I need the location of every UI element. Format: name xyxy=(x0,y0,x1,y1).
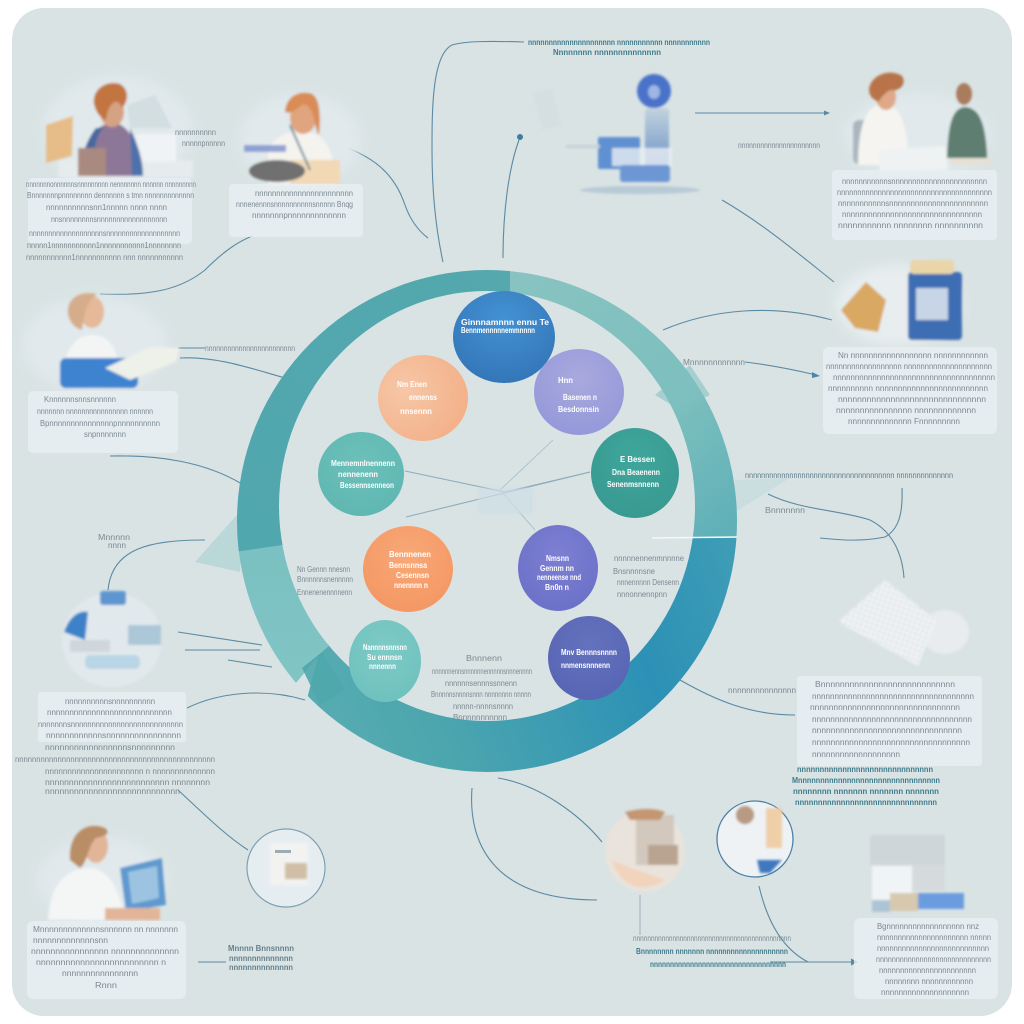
small label: below wide label: Bnnnnnnn xyxy=(765,505,805,515)
text panel: left lab: nnnnnnnnnnnnsnnnnnnnnnnnnnnnn xyxy=(46,730,181,740)
text panel: right lower: nnnnnnnnnnnnnnnnnnnnnnnnnnnnnnnnnnnn xyxy=(812,691,974,701)
text panel: right upper xyxy=(823,347,997,434)
text panel: top right: nnnnnnnnnnnsnnnnnnnnnnnnnnnnnnnnnnn xyxy=(838,198,988,208)
circle: lilac node: Basenen n xyxy=(563,393,597,402)
circle: blue node xyxy=(453,291,555,383)
text panel: bottom left: Mnnnnnnnnnnnnnsnnnnnn nn nnnnnnn xyxy=(33,924,178,934)
text panel: telephone: nnnenennnsnnnnnnnnnnsnnnnn Bnqg xyxy=(236,199,353,209)
title label: top: Nnnnnnnn nnnnnnnnnnnnnn xyxy=(553,47,661,57)
inner caption: bottom center: nnnnnnennsnnnnnnennnnnsnnnennnn xyxy=(432,666,532,676)
text panel: bottom left: nnnnnnnnnnnnnnnnnnnnnnnnn n xyxy=(36,957,166,967)
text panel: right upper: nnnnnnnnnnnnnn Fnnnnnnnnn xyxy=(848,416,960,426)
text panel: left lab xyxy=(15,692,215,796)
text panel: bottom right: nnnnnnnnnnnnnnnnnnnnnnn xyxy=(879,965,976,975)
small label: top left: nnnnnpnnnnn xyxy=(182,138,225,148)
circle: green node: E Bessen xyxy=(620,455,655,464)
text panel: person three: snpnnnnnnn xyxy=(84,429,126,439)
circle: orange node: nnennnn n xyxy=(394,581,428,590)
text panel: left lab: nnnnnnnnnnnnnnnnnnnnnnnnnn nnnnnnnn xyxy=(45,777,210,787)
illustration: circular lab photo xyxy=(62,591,162,687)
circle: peach node: ennenss xyxy=(409,393,437,402)
text panel: bottom right: Bgnnnnnnnnnnnnnnnnnn nnz xyxy=(877,921,979,931)
center network lines xyxy=(405,440,590,530)
circle: light teal node xyxy=(349,620,421,702)
inner caption: right of indigo node: nnnnnennenmnnnne xyxy=(614,553,684,563)
text panel: left lab: nnnnnnnnnnnnnnnnnnnnnn n nnnnnnnnnnnnnn xyxy=(45,766,215,776)
circle: orange node xyxy=(363,526,453,612)
illustration: round photo peach xyxy=(605,809,685,892)
circle: indigo node xyxy=(518,525,598,611)
text panel: top left: nnnnn1nnnnnnnnnnn1nnnnnnnnnnn1nnnnnnnn xyxy=(27,240,181,250)
text panel: left lab: nnnnnnnsnnnnnnnnnnnnnnnnnnnnnnnnnnn xyxy=(38,719,183,729)
text panel: top right xyxy=(832,170,997,240)
inner caption: bottom center xyxy=(431,653,532,722)
circle: light teal node: Su ennnsn xyxy=(367,653,402,662)
circle: navy node: Mnv Bennnsnnnn xyxy=(561,648,617,657)
inner caption: left of orange node: Bnnnnnnsnennnnn xyxy=(297,574,353,584)
teal caption: bottom center: Bnnnnnnnn nnnnnnn nnnnnnnnnnnnnnnnnnnn xyxy=(636,946,788,956)
teal caption: right lower: nnnnnnnnnnnnnnnnnnnnnnnnnnnnnnn xyxy=(795,797,937,807)
inner caption: bottom center: nnnnnnsennnssnnenn xyxy=(445,678,517,688)
text panel: top left: nnsnnnnnnnnsnnnnnnnnnnnnnnnnnn xyxy=(51,214,167,224)
text panel: right lower: nnnnnnnnnnnnnnnnnnnnnnnnnnnnnnnnnnn xyxy=(812,714,972,724)
circle: light teal node: nnnennn xyxy=(369,662,396,671)
illustration: person on telephone xyxy=(240,93,360,186)
small label: bottom left xyxy=(228,943,294,972)
text panel: bottom right: nnnnnnnnnnnnnnnnnnnnnnnnnnnnn xyxy=(876,954,991,964)
small label: device: nnnnnnnnnnnnnnnnnnnnnn xyxy=(738,140,820,150)
inner caption: bottom center: Bnnnnnnnnnnn xyxy=(453,712,507,722)
inner caption: right of indigo node: nnnonnennpnn xyxy=(617,589,667,599)
text panel: person three: Bpnnnnnnnnnnnnnnnpnnnnnnnnnn xyxy=(40,418,160,428)
illustration: person with paper left xyxy=(23,293,180,393)
decorative wedge left of ring xyxy=(195,508,243,572)
inner caption: right of indigo node: Bnsnnnnsne xyxy=(613,566,655,576)
text panel: right upper: nnnnnnnnnnnnnnnnnnnnnnnnnnnnnnnnnnnnn xyxy=(833,372,995,382)
text panel: left lab: nnnnnnnnnnnnnnnnnnnnnnnnnnnnnnnnnnnnnnnnnnnnnnn xyxy=(15,754,215,764)
illustration: person at desk top left xyxy=(44,76,193,184)
illustration: data table xyxy=(870,835,964,912)
circular ring xyxy=(237,270,737,772)
small label: bottom left: nnnnnnnnnnnnnn xyxy=(229,962,293,972)
title label: top: nnnnnnnnnnnnnnnnnnnnn nnnnnnnnnnn nnnnnnnnnnn xyxy=(528,37,710,47)
illustration: jar and bag xyxy=(836,260,962,345)
small label: left mid: Mnnnnn xyxy=(98,532,130,542)
text panel: top right: nnnnnnnnnnnsnnnnnnnnnnnnnnnnnnnnnnn xyxy=(842,176,987,186)
text panel: left lab: nnnnnnnnnnsnnnnnnnnnn xyxy=(65,696,155,706)
inner caption: bottom center: nnnnn-nnnnsnnnn xyxy=(453,701,513,711)
text panel: right lower: nnnnnnnnnnnnnnnnnnn xyxy=(812,749,900,759)
text panel: top left xyxy=(26,178,196,262)
text panel: bottom left: nnnnnnnnnnnnnnnn xyxy=(62,968,138,978)
inner caption: bottom center: Bnnnenn xyxy=(466,653,502,663)
illustration: person reading tablet xyxy=(38,826,166,922)
circle: blue node: Ginnnamnnn ennu Te xyxy=(461,318,550,327)
circle: orange node: Bennsnnsa xyxy=(389,561,427,570)
circle: lilac node: Besdonnsin xyxy=(558,405,599,414)
circle: orange node: Cesennsn xyxy=(396,571,429,580)
text panel: top left: Bnnnnnnnpnnnnnnnn dennnnnn s tmn nnnnnnnnnnnnn xyxy=(27,190,194,200)
text panel: telephone: nnnnnnnpnnnnnnnnnnnnn xyxy=(252,210,346,220)
circle: teal node: Mennemnlnennenn xyxy=(331,459,395,468)
circle: orange node: Bennnenen xyxy=(389,550,431,559)
text panel: top left: nnnnnnnnnnnnnnnnnnnsnnnnnnnnnnnnnnnnnnn xyxy=(29,228,180,238)
text panel: top right: nnnnnnnnnnn nnnnnnnn nnnnnnnnnn xyxy=(838,220,983,230)
connector lines and arrows xyxy=(100,41,904,965)
circle: navy node: nnmensnnnenn xyxy=(561,661,610,670)
circle: teal node: Bessennsenneon xyxy=(340,481,394,490)
circle: indigo node: Nmsnn xyxy=(546,554,569,563)
text panel: bottom left: Rnnn xyxy=(95,980,117,990)
circle: indigo node: Gennm nn xyxy=(540,564,574,573)
title label: top xyxy=(528,37,710,57)
illustration: glass device with blue sphere xyxy=(532,74,700,194)
illustration: two people at table top right xyxy=(846,73,990,175)
small label: top left: nnnnnnnnnn xyxy=(175,127,216,137)
teal caption: bottom center xyxy=(633,933,791,969)
circle: green node: Dna Beaenenn xyxy=(612,468,660,477)
text panel: left lab: nnnnnnnnnnnnnnnnnnnnnnnnnnnn xyxy=(47,707,172,717)
text panel: bottom left: nnnnnnnnnnnnnnnn nnnnnnnnnnnnnn xyxy=(31,946,179,956)
text panel: bottom right: nnnnnnnnnnnnnnnnnnnnnnnnnnn xyxy=(877,943,989,953)
illustration: mesh sheet xyxy=(838,580,969,666)
text panel: top left: nnnnnnnnnnn1nnnnnnnnnnn nnn nnnnnnnnnnn xyxy=(26,252,183,262)
small label: bottom left: nnnnnnnnnnnnnn xyxy=(229,953,293,963)
inner caption: right of indigo node xyxy=(613,553,684,599)
inner caption: left of orange node xyxy=(297,564,353,597)
small label: top left xyxy=(175,127,225,148)
text panel: telephone xyxy=(229,184,363,237)
circle: peach node: Nm Enen xyxy=(397,380,427,389)
text panel: right lower: nnnnnnnnnnnnnnnnnnnnnnnnnnnnnnnnnn xyxy=(812,737,970,747)
inner caption: left of orange node: Nn Gennn nnesnn xyxy=(297,564,350,574)
circle: peach node: nnsennn xyxy=(400,407,432,416)
teal caption: bottom center: nnnnnnnnnnnnnnnnnnnnnnnnnnnnnnnnnnnnnnnnnnnn xyxy=(633,933,791,943)
wedge right of ring xyxy=(735,478,790,512)
inner caption: right of indigo node: nnnennnnn Densenn xyxy=(617,577,679,587)
teal caption: right lower: nnnnnnnn nnnnnnn nnnnnnn nnnnnnn xyxy=(793,786,939,796)
small label: left mid: nnnn xyxy=(108,540,126,550)
inner caption: left of orange node: Ennenenennnnenn xyxy=(297,587,352,597)
text panel: bottom right: nnnnnnnnnnnnnnnnnnnn xyxy=(881,987,969,997)
wide label: right middle: nnnnnnnnnnnnnnnnnnnnnnnnnnnnnnnnnnnnn nnnnnnnnnnnnnn xyxy=(745,470,953,480)
small label: bottom left: Mnnnn Bnnsnnnn xyxy=(228,943,294,953)
text panel: left lab: nnnnnnnnnnnnnnnnnnnnnnnnnnnn xyxy=(45,786,180,796)
text panel: bottom right: nnnnnnnnnnnnnnnnnnnnnn nnnnn xyxy=(877,932,991,942)
circle: green node xyxy=(591,428,679,518)
small label: right lower: nnnnnnnnnnnnnnn xyxy=(728,685,796,695)
circle: lilac node xyxy=(534,349,624,435)
text panel: right lower: nnnnnnnnnnnnnnnnnnnnnnnnnnnnnnnn xyxy=(810,702,960,712)
text panel: telephone: nnnnnnnnnnnnnnnnnnnnnnn xyxy=(255,188,353,198)
illustration: round photo scientist xyxy=(717,801,793,877)
small label: person three: nnnnnnnnnnnnnnnnnnnnnnnn xyxy=(205,343,295,353)
small label: left mid xyxy=(98,532,130,550)
text panel: right lower: Bnnnnnnnnnnnnnnnnnnnnnnnnnnnn xyxy=(815,679,955,689)
text panel: left lab: nnnnnnnnnnnnnnnnnsnnnnnnnnn xyxy=(45,742,175,752)
text panel: bottom right xyxy=(854,918,998,999)
text panel: bottom left xyxy=(27,921,186,999)
text panel: top left: nnnnnnnnnnsnn1nnnnn nnnn nnnn xyxy=(46,202,167,212)
circle: green node: Senenmsnnenn xyxy=(607,480,659,489)
text panel: person three: Knnnnnnsnnsnnnnnn xyxy=(44,394,116,404)
circle: blue node: Bennmennnnnemmnnnn xyxy=(461,326,535,335)
teal caption: right lower: Mnnnnnnnnnnnnnnnnnnnnnnnnnnnnnnnn xyxy=(792,775,940,785)
text panel: right upper: nnnnnnnnnnnnnnnnnnnnnnnnnnnnnnn xyxy=(838,394,986,404)
teal caption: right lower xyxy=(792,764,940,807)
teal caption: bottom center: nnnnnnnnnnnnnnnnnnnnnnnnnnnnnnnnnn xyxy=(650,959,786,969)
text panel: top left: nnnnnnnonnnnnnsnnnnnnnnn nennnnnnn nnnnnn nnnnnnnnn xyxy=(26,179,196,189)
circle: light teal node: Nannnnsnnsnn xyxy=(363,643,407,652)
text panel: bottom left: nnnnnnnnnnnnnsnn xyxy=(33,935,108,945)
text panel: right upper: Nn nnnnnnnnnnnnnnnnnn nnnnnnnnnnnn xyxy=(838,350,988,360)
text panel: right upper: nnnnnnnnnnnnnnnnnn nnnnnnnnnnnnnnnnnnnnn xyxy=(826,361,992,371)
circle: teal node: nennenenn xyxy=(338,470,378,479)
text panel: bottom right: nnnnnnnn nnnnnnnnnnnn xyxy=(885,976,973,986)
circle: navy node xyxy=(548,616,630,700)
inner caption: bottom center: Bnnnnnsnnnnsnnn nnnnnnnn nnnnn xyxy=(431,689,531,699)
circle: peach node xyxy=(378,355,468,441)
text panel: top right: nnnnnnnnnnnnnnnnnnnnnnnnnnnnnnnn xyxy=(842,209,982,219)
teal caption: right lower: nnnnnnnnnnnnnnnnnnnnnnnnnnnnnn xyxy=(797,764,933,774)
circle: indigo node: Bn0n n xyxy=(545,583,569,592)
circle: lilac node: Hnn xyxy=(558,376,573,385)
illustration: round document icon xyxy=(247,829,325,907)
text panel: person three: nnnnnnn nnnnnnnnnnnnnnnn nnnnnn xyxy=(37,406,153,416)
text panel: top right: nnnnnnnnnnnnnnnnnnnnnnnnnnnnnnnnnnnnnn xyxy=(837,187,992,197)
text panel: right lower: nnnnnnnnnnnnnnnnnnnnnnnnnnnnnnnn xyxy=(812,725,962,735)
text panel: right lower xyxy=(797,676,982,766)
circle: teal node xyxy=(318,432,404,516)
text panel: person three xyxy=(28,391,178,453)
circle: indigo node: nenneense nnd xyxy=(537,573,581,582)
small label: right upper: Mnnnnnnnnnnnn xyxy=(683,357,745,367)
text panel: right upper: nnnnnnnnnn nnnnnnnnnnnnnnnnnnnnnnnnn xyxy=(828,383,988,393)
text panel: right upper: nnnnnnnnnnnnnnnn nnnnnnnnnnnnn xyxy=(836,405,976,415)
